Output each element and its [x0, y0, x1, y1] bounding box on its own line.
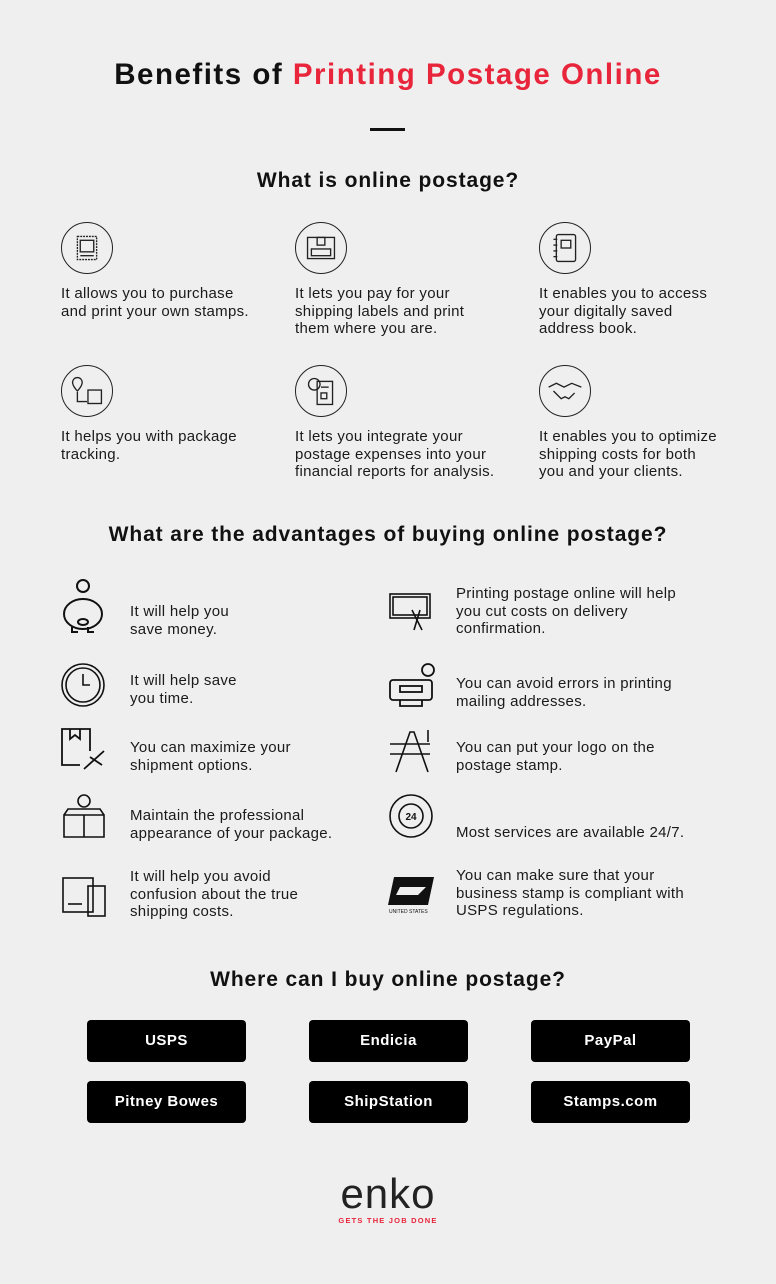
- button: ShipStation: [309, 1081, 468, 1123]
- text: It enables you to optimize: [539, 428, 717, 445]
- text: It helps you with package: [61, 428, 237, 445]
- button: Endicia: [309, 1020, 468, 1062]
- icon: label box: [295, 222, 347, 274]
- logo: GETS THE JOB DONE: [338, 1216, 438, 1225]
- logo: enko: [340, 1170, 436, 1217]
- text: shipping costs for both: [539, 446, 696, 462]
- icon: handshake: [539, 365, 591, 417]
- text: shipping labels and print: [295, 302, 464, 320]
- text: [295, 428, 494, 480]
- heading: what is online postage: What is online postage?: [257, 169, 519, 192]
- icon: money: [389, 593, 431, 630]
- text: [539, 285, 707, 337]
- item: labels: [295, 222, 464, 337]
- text: [295, 285, 464, 337]
- text: You can avoid errors in printing: [456, 675, 672, 692]
- title: Benefits of Printing Postage Online: [114, 58, 662, 91]
- text: you and your clients.: [539, 463, 683, 480]
- text: you time.: [130, 690, 194, 706]
- text: You can put your logo on the: [456, 739, 655, 756]
- icon: address book: [539, 222, 591, 274]
- icon: clock: [61, 663, 105, 707]
- text: [61, 285, 249, 320]
- text: them where you are.: [295, 320, 437, 337]
- text: It enables you to access: [539, 285, 707, 302]
- button: Pitney Bowes: Pitney Bowes: [115, 1093, 218, 1110]
- text: save money.: [130, 620, 217, 638]
- text: mailing addresses.: [456, 692, 586, 710]
- button: Pitney Bowes: [87, 1081, 246, 1123]
- item: tracking: [61, 365, 237, 462]
- text: [130, 739, 291, 774]
- button: PayPal: PayPal: [584, 1032, 637, 1049]
- text: your digitally saved: [539, 302, 673, 320]
- text: [130, 603, 229, 638]
- text: shipping costs.: [130, 903, 234, 920]
- text: It will help save: [130, 672, 237, 689]
- icon: calculator box: [62, 877, 106, 917]
- text: It lets you integrate your: [295, 428, 463, 445]
- button: USPS: USPS: [145, 1032, 188, 1049]
- item: financial: [295, 365, 494, 480]
- button: USPS: [87, 1020, 246, 1062]
- text: confusion about the true: [130, 886, 298, 902]
- icon: 24 clock: [389, 794, 433, 838]
- text: [456, 585, 676, 637]
- item: address book: [539, 222, 707, 337]
- text: It will help you avoid: [130, 868, 271, 885]
- text: [456, 675, 672, 710]
- text: appearance of your package.: [130, 824, 332, 842]
- text: shipment options.: [130, 756, 253, 774]
- text: business stamp is compliant with: [456, 884, 684, 902]
- icon: printer: [389, 663, 435, 707]
- right list: [388, 585, 684, 919]
- item: optimize: [539, 365, 717, 480]
- button: ShipStation: ShipStation: [344, 1093, 433, 1110]
- text: postage stamp.: [456, 756, 563, 774]
- icon: usps eagle: UNITED STATES: [389, 909, 428, 915]
- text: Most services are available 24/7.: [456, 824, 684, 841]
- text: you cut costs on delivery: [456, 602, 628, 620]
- text: It allows you to purchase: [61, 285, 234, 302]
- icon: tracking: [61, 365, 113, 417]
- text: It will help you: [130, 603, 229, 620]
- icon: piggy bank: [63, 579, 103, 633]
- text: [456, 867, 684, 919]
- text: [130, 807, 332, 842]
- button: Endicia: Endicia: [360, 1032, 417, 1049]
- text: Maintain the professional: [130, 807, 304, 824]
- text: [130, 868, 298, 920]
- text: [539, 428, 717, 480]
- item: stamps: [61, 222, 249, 320]
- icon: logo drafting: [390, 730, 430, 772]
- text: address book.: [539, 320, 637, 337]
- text: [130, 672, 237, 706]
- button: PayPal: [531, 1020, 690, 1062]
- text: [456, 739, 655, 774]
- text: You can make sure that your: [456, 867, 654, 884]
- button: Stamps.com: Stamps.com: [563, 1093, 658, 1110]
- text: postage expenses into your: [295, 446, 486, 462]
- buttons: [87, 1020, 690, 1123]
- text: [61, 428, 237, 462]
- text: financial reports for analysis.: [295, 463, 494, 480]
- text: USPS regulations.: [456, 902, 584, 919]
- text: and print your own stamps.: [61, 302, 249, 320]
- button: Stamps.com: [531, 1081, 690, 1123]
- icon: stamp: [61, 222, 113, 274]
- text: You can maximize your: [130, 739, 291, 756]
- heading: where to buy: Where can I buy online postage?: [210, 968, 566, 991]
- icon: 24 clock: 24: [405, 812, 417, 823]
- left list: [61, 579, 332, 920]
- text: confirmation.: [456, 620, 546, 637]
- icon: report: [295, 365, 347, 417]
- icon: box plane: [61, 728, 104, 770]
- icon: open box: [63, 794, 105, 838]
- icon: usps eagle: [388, 877, 434, 915]
- text: Printing postage online will help: [456, 585, 676, 602]
- text: tracking.: [61, 446, 120, 462]
- heading: advantages: What are the advantages of buying online postage?: [109, 523, 667, 546]
- text: It lets you pay for your: [295, 285, 450, 302]
